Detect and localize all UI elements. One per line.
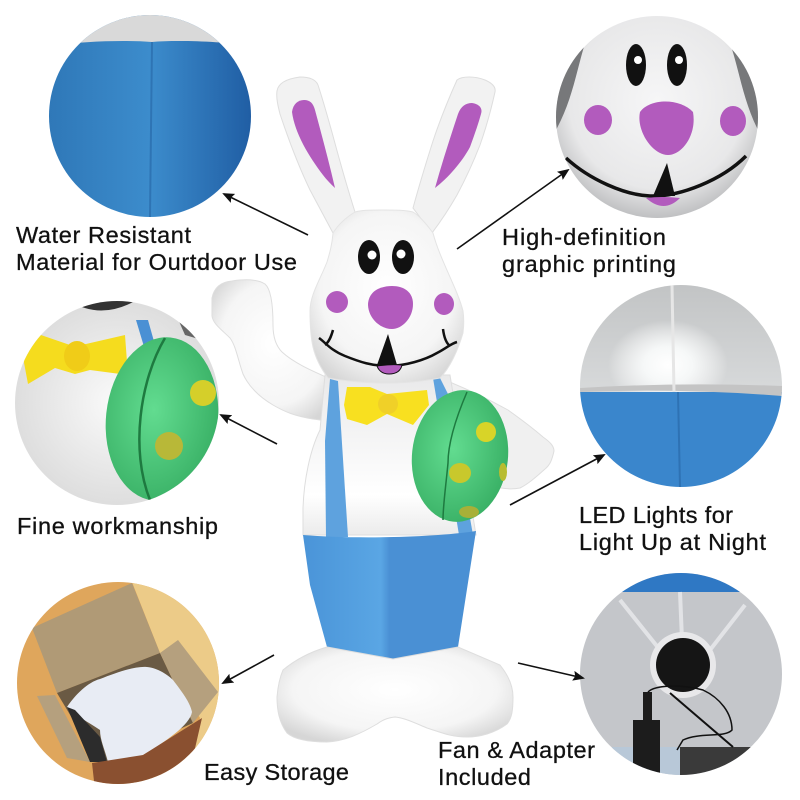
arrow: to LED circle: [510, 455, 604, 505]
bunny: right ear: [413, 77, 495, 233]
bunny: right suspender: [433, 378, 473, 535]
label: fan and adapter: Included: [438, 764, 531, 790]
arrow: to egg circle: [221, 415, 277, 444]
bunny: bow tie: [344, 387, 429, 425]
label: easy storage: Easy Storage: [204, 759, 349, 785]
bunny: feet: [277, 647, 513, 742]
label: fine workmanship: Fine workmanship: [17, 513, 218, 539]
bunny: left ear: [277, 77, 355, 233]
circle: high-definition face detail: [556, 16, 758, 218]
bunny: egg: [405, 385, 515, 527]
label: high-definition printing: graphic printing: [502, 251, 676, 277]
arrow: to fan circle: [518, 663, 583, 678]
bunny: left suspender: [325, 379, 348, 537]
label: LED lights: LED Lights for: [579, 502, 733, 528]
bunny: pants: [303, 531, 476, 659]
label: water resistant: Material for Ourtdoor Use: [16, 249, 297, 275]
arrow: to storage circle: [223, 655, 274, 683]
bunny: left arm: [212, 280, 335, 422]
bunny: nose: [368, 286, 413, 329]
circle: LED lights: [580, 285, 782, 488]
label: fan and adapter: Fan & Adapter: [438, 737, 595, 763]
bunny: right ear lining: [435, 103, 482, 188]
arrow: to face circle: [457, 170, 568, 249]
bunny: right eye: [392, 240, 414, 274]
bunny: right cheek: [434, 293, 454, 315]
bunny: left eye: [358, 240, 380, 274]
label: water resistant: Water Resistant: [16, 222, 191, 248]
label: LED lights: Light Up at Night: [579, 529, 766, 555]
bunny: tongue: [377, 365, 402, 374]
circle: easy storage box: [17, 582, 219, 800]
bunny: smile: [319, 329, 457, 366]
circle: fine workmanship egg detail: [15, 301, 226, 506]
bunny illustration: [212, 77, 554, 742]
label: high-definition printing: High-definition: [502, 224, 666, 250]
bunny: head: [310, 210, 464, 383]
bunny: left ear lining: [292, 100, 335, 188]
circle: water resistant material: [49, 15, 251, 217]
bunny: right arm: [440, 378, 554, 489]
bunny: torso: [303, 375, 476, 535]
arrow: to water resistant circle: [224, 194, 308, 235]
bunny: mouth: [377, 334, 397, 365]
bunny: left cheek: [326, 291, 348, 313]
circle: fan and adapter: [580, 573, 784, 780]
